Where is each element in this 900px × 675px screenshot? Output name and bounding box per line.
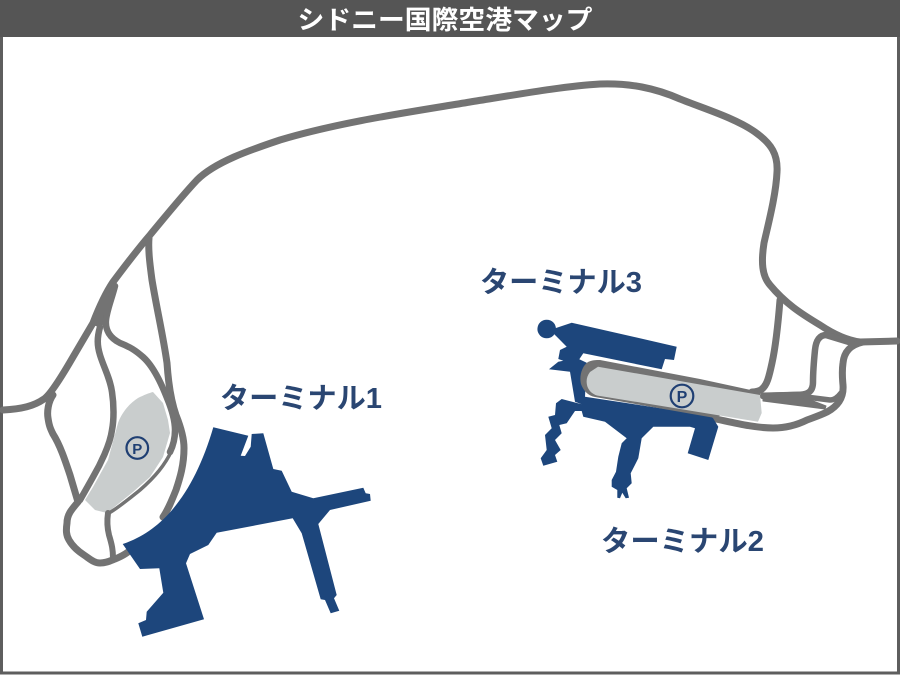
label: terminal 3: ターミナル3 <box>480 266 642 299</box>
road: lot south edge <box>109 450 172 513</box>
terminal 2 and 3 building <box>537 320 718 498</box>
road: south link <box>107 513 113 558</box>
road: middle east <box>763 335 849 396</box>
title bar <box>0 0 900 37</box>
icon: parking: P <box>677 389 688 406</box>
parking lot: terminal 1 <box>85 392 170 513</box>
road: lower east <box>716 342 863 428</box>
terminal 1 building <box>123 427 371 637</box>
road: junction wedge <box>92 284 116 327</box>
main perimeter road <box>3 84 897 410</box>
icon: parking <box>671 385 693 407</box>
road network <box>3 84 897 563</box>
road: left loop <box>48 395 128 563</box>
road: inner north-south <box>149 238 184 517</box>
parking lot: terminal 2-3 <box>580 360 762 422</box>
label: terminal 1: ターミナル1 <box>220 382 382 415</box>
title bar: シドニー国際空港マップ <box>298 5 592 35</box>
road: inner east <box>106 286 175 452</box>
road: east wedge <box>763 392 826 409</box>
road: inner west <box>80 327 114 500</box>
icon: parking: P <box>132 441 142 458</box>
road: east branch <box>752 300 780 392</box>
label: terminal 2: ターミナル2 <box>601 525 764 558</box>
